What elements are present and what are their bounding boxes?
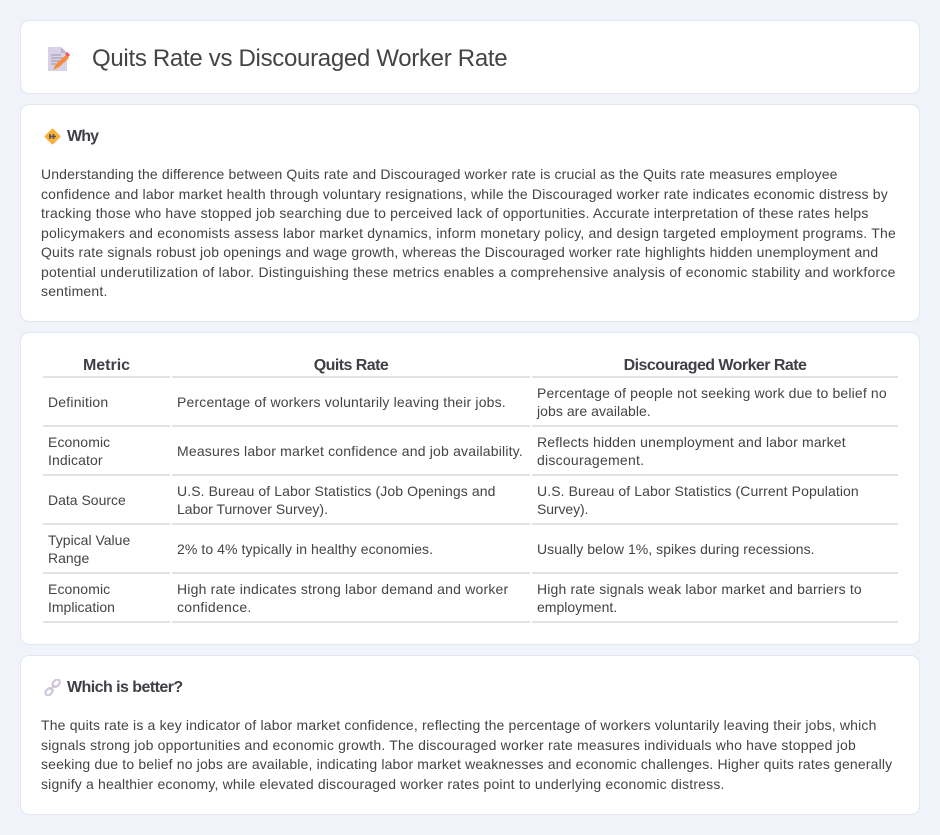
row: data source — [43, 483, 898, 525]
row: typical value range: Usually below 1%, spikes during recessions. — [537, 541, 815, 557]
panel: which is better — [20, 655, 920, 815]
row: economic indicator: Economic — [48, 434, 110, 450]
text block: why paragraph: Quits rate signals robust job openings and wage growth, whereas the Discouraged worker rate highlights hidden unemployment and — [41, 244, 878, 260]
row: definition — [43, 385, 898, 427]
table header row: Discouraged Worker Rate — [624, 357, 806, 374]
row: typical value range — [43, 532, 898, 574]
text block: which is better paragraph — [41, 717, 892, 792]
icon: document with pencil — [48, 47, 70, 71]
row: economic implication — [43, 581, 898, 623]
text block: why paragraph: confidence and labor market health through voluntary resignations, while the Discouraged worker rate indicates economic distress by — [41, 186, 888, 202]
text block: which is better paragraph: The quits rate is a key indicator of labor market confidence, reflecting the percentage of workers voluntarily leaving their jobs, which — [41, 717, 877, 733]
icon: warning diamond — [44, 128, 60, 144]
text block: why paragraph: Understanding the difference between Quits rate and Discouraged worker rate is crucial as the Quits rate measures employee — [41, 166, 838, 182]
row: economic implication: confidence. — [177, 599, 252, 615]
text block: why paragraph: potential underutilization of labor. Distinguishing these metrics enables a comprehensive analysis of economic stability and workforce — [41, 264, 896, 280]
text block: why paragraph: tracking those who have stopped job searching due to perceived lack of opportunities. Accurate interpretation of these rates helps — [41, 205, 869, 221]
table header row: Metric — [83, 357, 130, 374]
row: economic indicator: discouragement. — [537, 452, 644, 468]
row: definition: Percentage of workers voluntarily leaving their jobs. — [177, 394, 506, 410]
row: typical value range: Typical Value — [48, 532, 130, 548]
row: data source: Survey). — [537, 501, 588, 517]
row: economic indicator: Reflects hidden unemployment and labor market — [537, 434, 846, 450]
text block: why paragraph: sentiment. — [41, 283, 108, 299]
row: data source: U.S. Bureau of Labor Statistics (Current Population — [537, 483, 859, 499]
heading: which is better: Which is better? — [67, 679, 183, 696]
panel: comparison table — [20, 332, 920, 645]
row: economic implication: High rate signals weak labor market and barriers to — [537, 581, 862, 597]
row: economic implication: employment. — [537, 599, 617, 615]
panel: header — [20, 20, 920, 94]
row: data source: Data Source — [48, 492, 126, 508]
row: definition: jobs are available. — [537, 403, 651, 419]
heading: why: Why — [67, 128, 98, 145]
row: data source: Labor Turnover Survey). — [177, 501, 328, 517]
row: economic implication: Implication — [48, 599, 115, 615]
row: economic indicator: Measures labor market confidence and job availability. — [177, 443, 523, 459]
row: typical value range: 2% to 4% typically in healthy economies. — [177, 541, 433, 557]
panel: why — [20, 104, 920, 322]
row: typical value range: Range — [48, 550, 89, 566]
row: definition: Definition — [48, 394, 108, 410]
icon: chain link — [44, 679, 61, 696]
row: economic implication: High rate indicates strong labor demand and worker — [177, 581, 508, 597]
text block: which is better paragraph: seeking due to belief no jobs are available, indicating labor market weaknesses and economic challenges. Higher quits rates generally — [41, 756, 892, 772]
table header row — [43, 357, 898, 378]
row: definition: Percentage of people not seeking work due to belief no — [537, 385, 887, 401]
row: economic indicator — [43, 434, 898, 476]
row: economic implication: Economic — [48, 581, 110, 597]
text block: which is better paragraph: signify a healthier economy, while elevated discouraged worker rates point to underlying economic distress. — [41, 776, 725, 792]
text block: which is better paragraph: signals strong job opportunities and economic growth. The discouraged worker rate measures individuals who have stopped job — [41, 736, 856, 752]
table header row: Quits Rate — [314, 357, 388, 374]
row: economic indicator: Indicator — [48, 452, 103, 468]
title: Quits Rate vs Discouraged Worker Rate — [92, 45, 507, 72]
text block: why paragraph: policymakers and economists assess labor market dynamics, inform monetary policy, and design targeted employment programs. The — [41, 224, 896, 240]
row: data source: U.S. Bureau of Labor Statistics (Job Openings and — [177, 483, 496, 499]
text block: why paragraph — [41, 166, 896, 299]
